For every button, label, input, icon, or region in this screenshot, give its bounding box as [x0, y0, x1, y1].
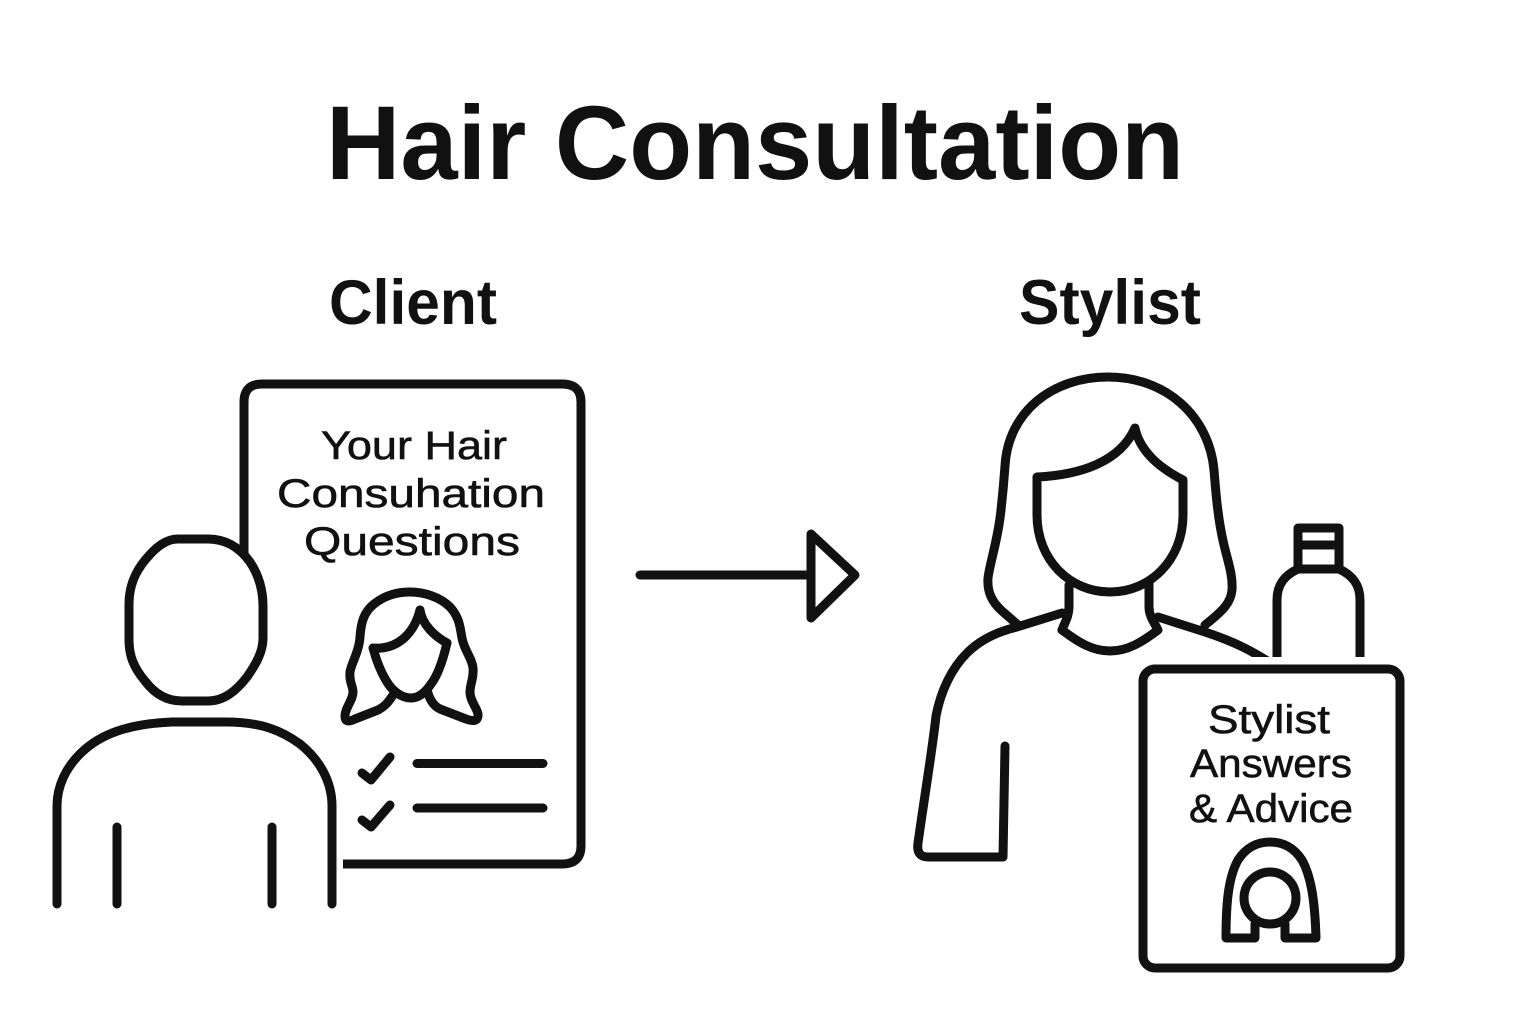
stylist face — [1037, 428, 1183, 592]
stylist right shoulder — [1158, 617, 1278, 668]
questionnaire heading: Consuhation — [277, 472, 545, 516]
checklist row 2 — [362, 805, 543, 827]
answers text — [1189, 698, 1353, 831]
client arms — [117, 827, 272, 904]
panel: client questionnaire — [244, 384, 581, 864]
stylist body — [918, 613, 1062, 857]
arrow — [640, 534, 855, 618]
questionnaire outline — [244, 384, 581, 864]
questionnaire heading: Questions — [304, 520, 520, 564]
icon: client figure — [57, 539, 332, 904]
bottle body — [1277, 569, 1360, 664]
questionnaire heading: Your Hair — [321, 424, 507, 468]
stylist hair — [988, 377, 1232, 625]
title: Hair Consultation — [326, 85, 1184, 202]
heading: client: Client — [329, 268, 497, 338]
client body — [57, 722, 332, 904]
answers text: Answers — [1190, 742, 1352, 786]
heading: stylist: Stylist — [1019, 268, 1201, 338]
icon: hair silhouette — [1226, 842, 1316, 938]
answers card outline — [1143, 669, 1400, 968]
answers text: Stylist — [1208, 698, 1330, 742]
panel: stylist answers — [1143, 669, 1400, 968]
stylist neck and collar — [1062, 583, 1158, 651]
questionnaire heading — [277, 424, 545, 564]
client head — [129, 539, 263, 701]
icon: bottle — [1277, 528, 1360, 664]
answers text: & Advice — [1189, 787, 1353, 831]
icon: woman's hair portrait — [345, 592, 478, 721]
bottle cap — [1298, 528, 1339, 569]
checklist row 1 — [362, 757, 543, 780]
icon: stylist figure — [918, 377, 1278, 857]
